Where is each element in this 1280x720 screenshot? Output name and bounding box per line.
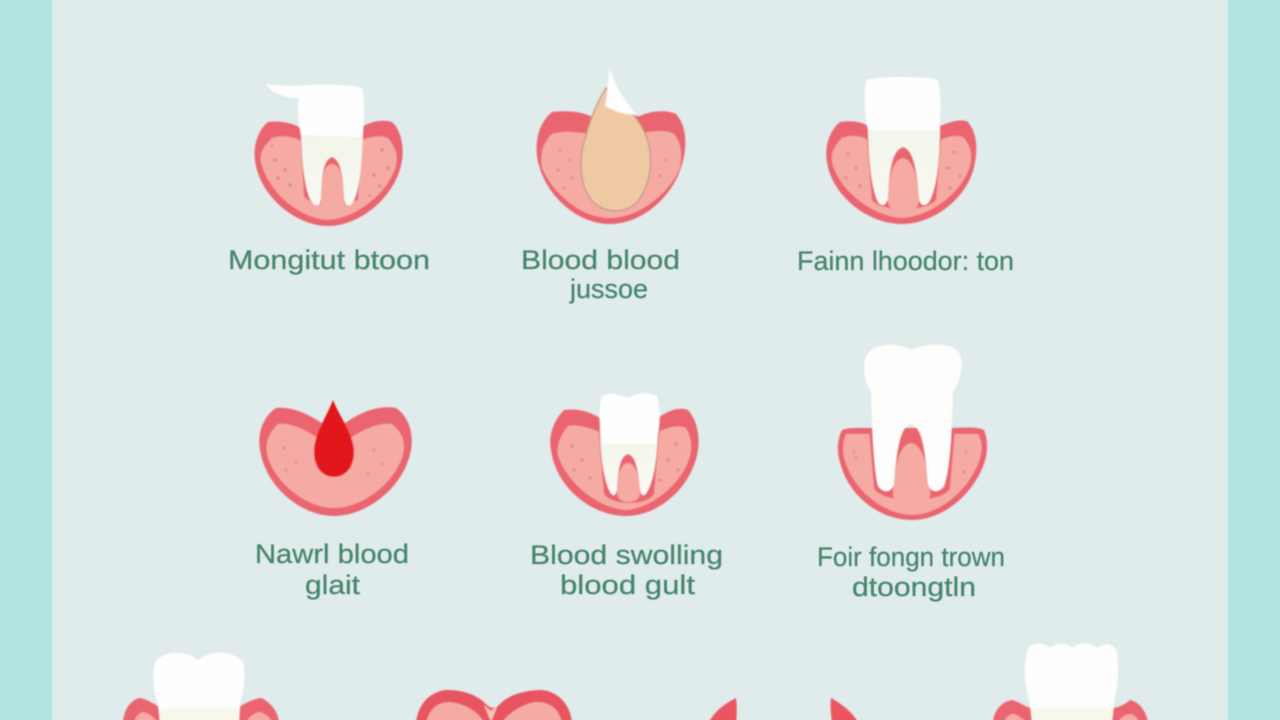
label: Foir fongn trown dtoongtln: Foir fongn trown bbox=[817, 542, 1005, 572]
icon: tall tooth in receded gum bbox=[838, 344, 987, 520]
label: Blood swolling blood gult: blood gult bbox=[560, 570, 696, 600]
icon: healthy tooth with uneven crown bbox=[255, 84, 403, 226]
icon: healthy tooth with square crown bbox=[826, 77, 976, 224]
label: Nawrl blood glait: glait bbox=[305, 570, 361, 600]
label: Fainn lhoodor ton: Fainn lhoodor: ton bbox=[797, 246, 1014, 276]
icon: gum with red blood drop bbox=[259, 400, 412, 516]
icon: small tooth in swollen gum bbox=[550, 393, 699, 516]
label: Nawrl blood glait bbox=[255, 539, 409, 600]
label: Blood swolling blood gult: Blood swolling bbox=[530, 540, 723, 570]
label: Foir fongn trown dtoongtln: dtoongtln bbox=[852, 572, 976, 602]
icon: bottom row gum shards bbox=[709, 698, 858, 720]
label: Foir fongn trown dtoongtln bbox=[817, 542, 1005, 602]
label: Blood blood jussoe bbox=[521, 245, 680, 304]
icon: bottom row tooth, left bbox=[123, 653, 279, 720]
label: Blood blood jussoe: Blood blood bbox=[521, 245, 680, 275]
icon: bottom row gum with two lobes bbox=[416, 690, 572, 720]
label: Blood swolling blood gult bbox=[530, 540, 723, 600]
label: Mongitut btoon: Mongitut btoon bbox=[228, 245, 430, 275]
icon: tooth with swollen tan core bbox=[537, 68, 685, 224]
label: Blood blood jussoe: jussoe bbox=[569, 274, 648, 304]
icon: bottom row tooth, right bbox=[993, 644, 1148, 720]
label: Nawrl blood glait: Nawrl blood bbox=[255, 539, 409, 569]
